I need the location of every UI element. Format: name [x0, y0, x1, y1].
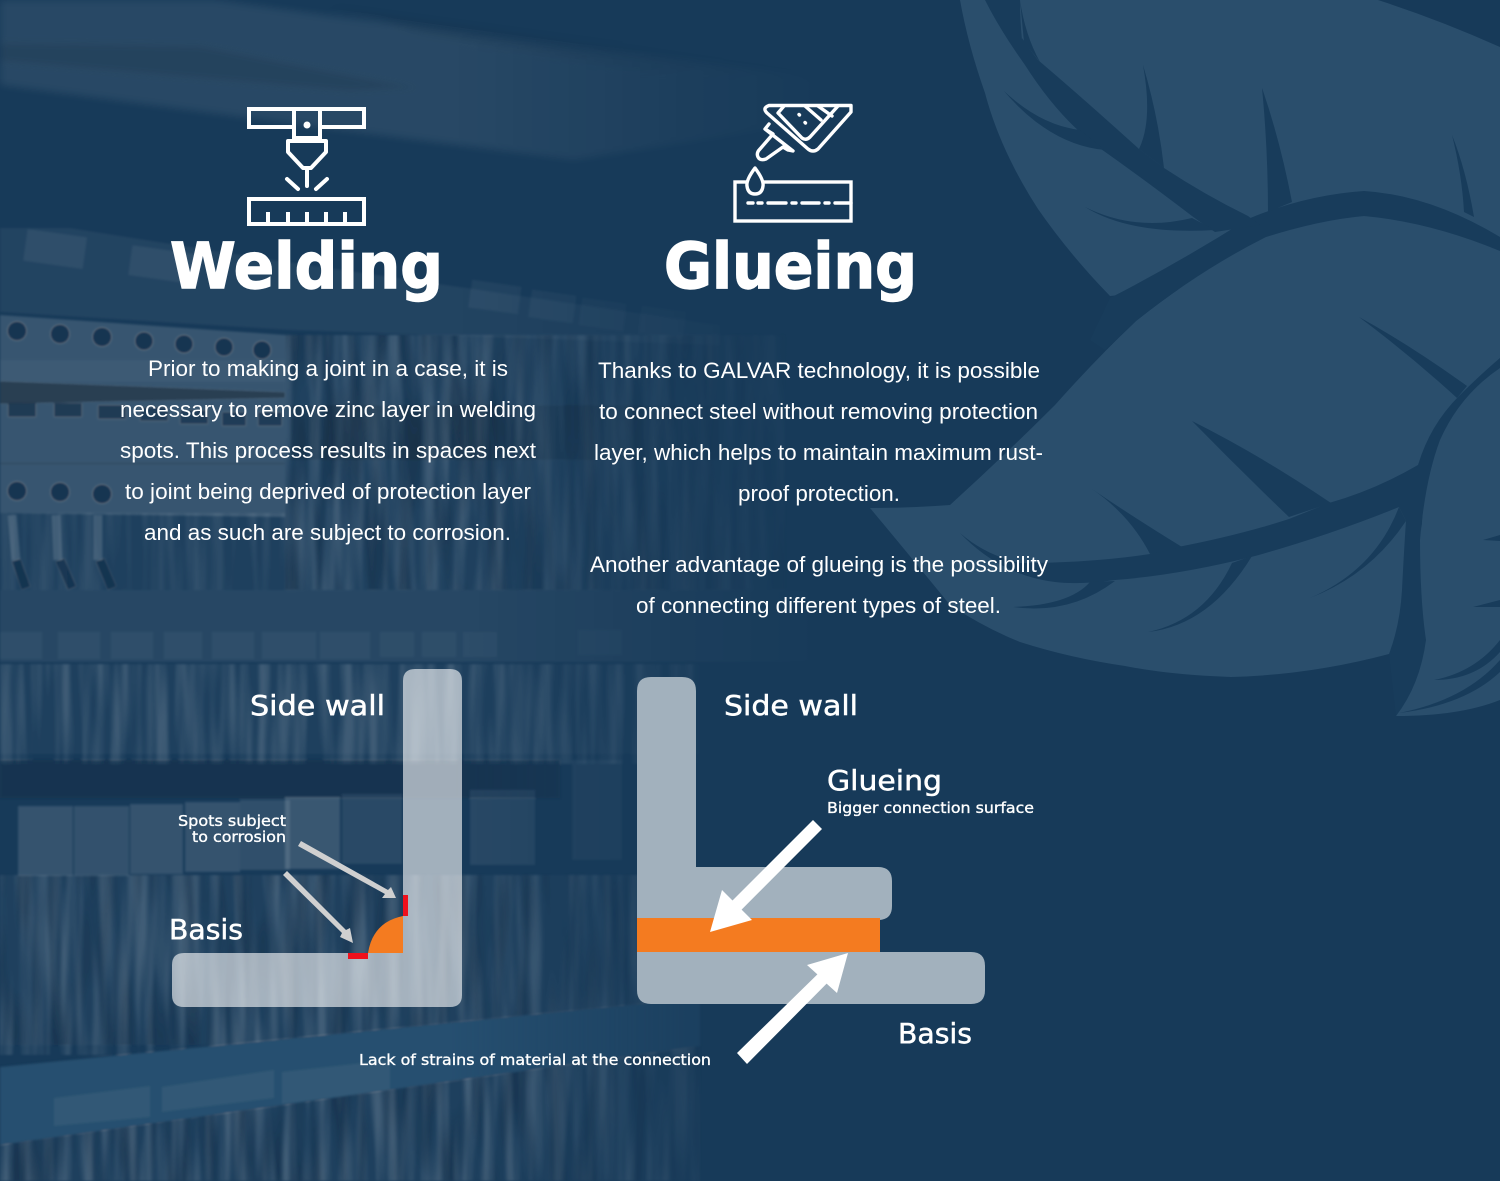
- leaf: large middle: [870, 216, 1500, 677]
- cables under breakers: [16, 560, 112, 588]
- label: side wall: Side wall: [724, 689, 858, 722]
- label: side wall: Side wall: [250, 689, 385, 722]
- text block: welding description: Prior to making a joint in a case, it is: [148, 356, 508, 381]
- upper label rail: [0, 228, 599, 336]
- diagram: welding joint: [169, 669, 462, 1007]
- label: basis: Basis: [898, 1017, 972, 1050]
- text block: welding description: and as such are subject to corrosion.: [144, 520, 511, 545]
- wires above terminals: [0, 664, 700, 754]
- text block: glueing description: Thanks to GALVAR technology, it is possible: [598, 358, 1040, 383]
- label: spots subject to corrosion: Spots subject: [178, 812, 286, 830]
- heading: Welding: Welding: [170, 230, 443, 303]
- diagram: glued joint: [359, 677, 1034, 1069]
- background photo: electrical cabinet: [0, 0, 710, 1181]
- text block: welding description: spots. This process results in spaces next: [120, 438, 537, 463]
- label: bigger connection surface: Bigger connection surface: [827, 799, 1034, 817]
- arrow: to vertical spot: [298, 841, 396, 898]
- heading: Glueing: Glueing: [664, 230, 917, 303]
- welded L profile: [172, 669, 462, 1007]
- text block: welding description: necessary to remove zinc layer in welding: [120, 397, 536, 422]
- relays: [18, 806, 73, 876]
- upper wires: [286, 335, 582, 589]
- text block: glueing description: [590, 358, 1049, 618]
- bottom wires: [0, 1046, 700, 1181]
- glue layer: [637, 918, 880, 952]
- arrow: to horizontal spot: [283, 871, 353, 943]
- thorns upper leaf: [1020, 0, 1040, 62]
- text block: welding description: to joint being deprived of protection layer: [125, 479, 531, 504]
- label: glueing: Glueing: [827, 764, 942, 797]
- leaf: right: [1396, 358, 1500, 716]
- main arc vein: [1090, 191, 1500, 350]
- label: basis: Basis: [169, 913, 243, 946]
- leaf: top: [960, 0, 1500, 296]
- midrib: [960, 358, 1500, 716]
- corrosion spot: horizontal: [348, 953, 368, 959]
- basis profile: [637, 952, 985, 1004]
- side wall profile: [637, 677, 892, 920]
- label: lack of strains: Lack of strains of material at the connection: [359, 1051, 711, 1069]
- text block: glueing description: proof protection.: [738, 481, 900, 506]
- label strip: [0, 588, 646, 662]
- terminal band: [0, 760, 560, 798]
- background leaves: [870, 0, 1500, 716]
- corrosion spot: vertical: [403, 895, 408, 916]
- upper branch vein: [985, 0, 1260, 232]
- text block: glueing description: layer, which helps to maintain maximum rust-: [594, 440, 1043, 465]
- label: spots subject to corrosion: to corrosion: [192, 828, 286, 846]
- lower rail: [0, 998, 700, 1145]
- weld seam: [368, 916, 403, 953]
- arrow: lack of strains: [737, 953, 848, 1064]
- lower wires: [0, 876, 568, 1046]
- breakers: [0, 315, 285, 517]
- text block: glueing description: of connecting different types of steel.: [636, 593, 1001, 618]
- text block: welding description: [120, 356, 537, 545]
- text block: glueing description: to connect steel without removing protection: [599, 399, 1038, 424]
- thorns right leaf: [1483, 535, 1500, 541]
- label: spots subject to corrosion: [178, 812, 286, 846]
- icon: glue bottle: [735, 106, 851, 221]
- leaf veins: [960, 0, 1500, 716]
- arrow: bigger connection surface: [710, 820, 822, 932]
- text block: glueing description: Another advantage of glueing is the possibility: [590, 552, 1049, 577]
- thorns middle leaf: [1359, 317, 1467, 398]
- icon: welding machine: [249, 109, 364, 224]
